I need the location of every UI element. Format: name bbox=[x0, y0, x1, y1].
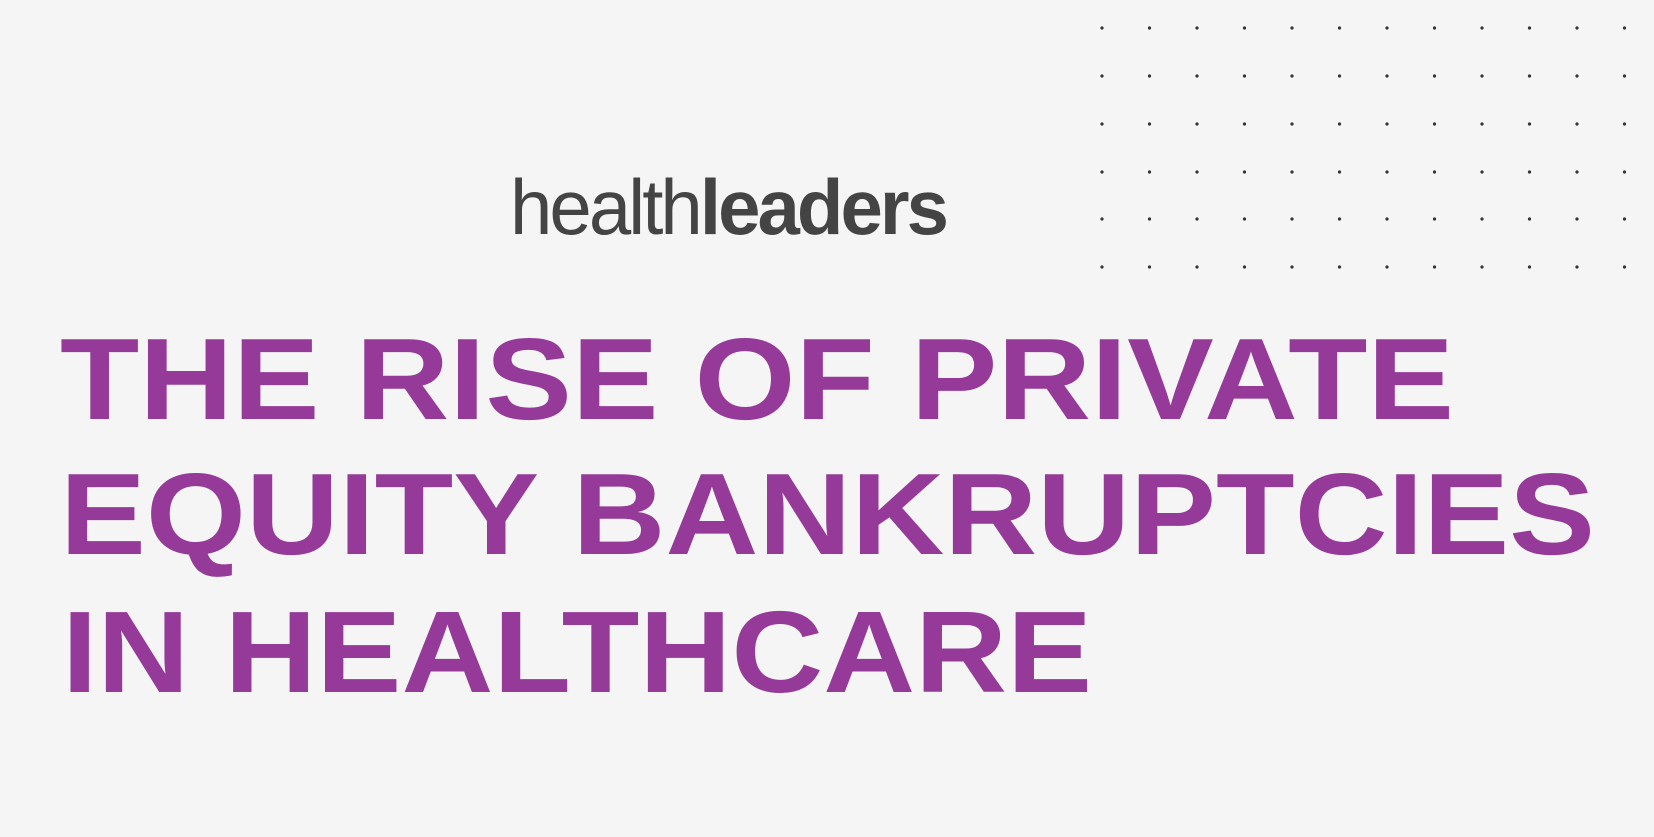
title: IN HEALTHCARE bbox=[62, 587, 1092, 717]
title bbox=[60, 314, 1595, 717]
logo: healthleaders: healthleaders bbox=[510, 163, 947, 251]
dot grid decoration bbox=[1100, 26, 1626, 269]
title: EQUITY BANKRUPTCIES bbox=[60, 449, 1595, 579]
title: THE RISE OF PRIVATE bbox=[60, 314, 1454, 444]
